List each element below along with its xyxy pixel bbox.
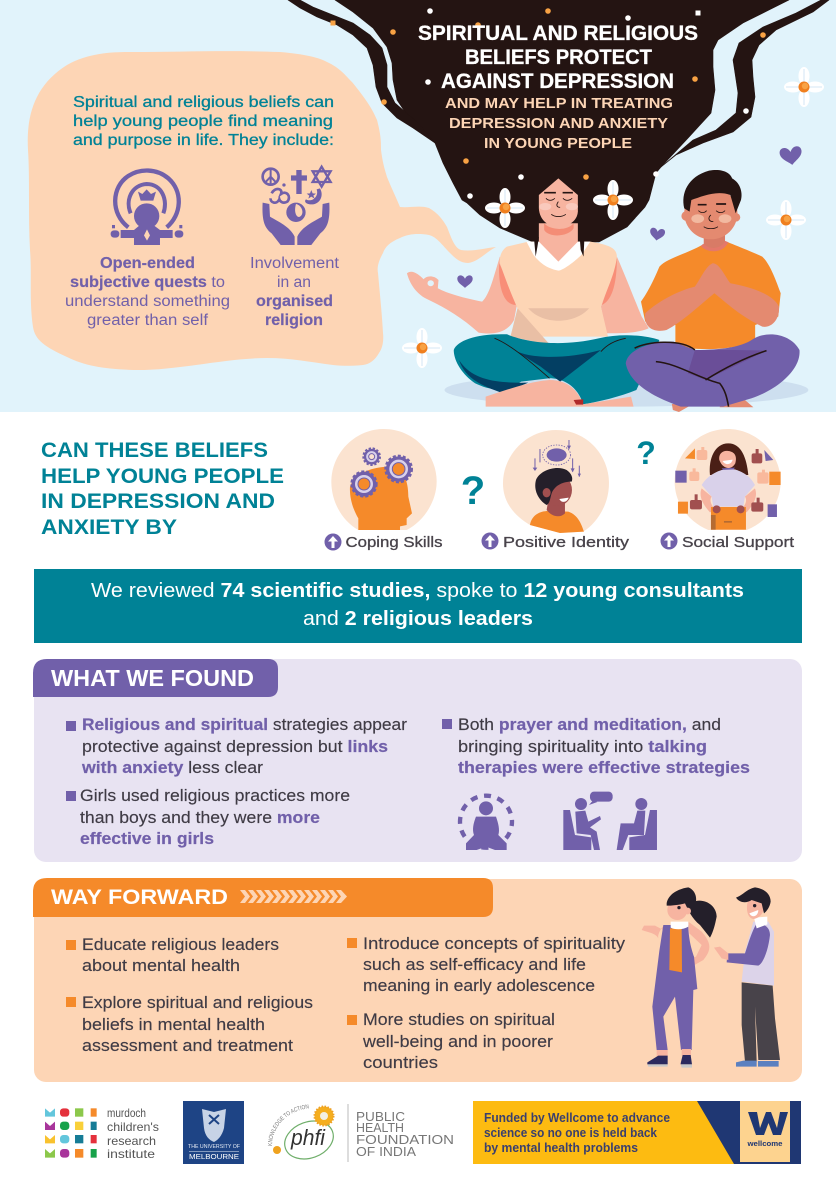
caption: open-ended subjective quests: understand something (65, 293, 230, 310)
hair dots (330, 8, 766, 199)
logo: Murdoch Children's Research Institute (45, 1106, 159, 1161)
caption: organised religion: organised (256, 293, 333, 310)
logo: Public Health Foundation of India: PUBLIC (356, 1109, 405, 1124)
logo: Wellcome funding banner: science so no one is held back (484, 1126, 657, 1140)
icon: religion symbols in hands (262, 167, 331, 245)
logo: University of Melbourne: MELBOURNE (189, 1154, 239, 1161)
question heading: IN DEPRESSION AND (41, 490, 275, 513)
question heading: ANXIETY BY (41, 516, 177, 539)
flowers and hearts (402, 67, 824, 368)
logo: Wellcome funding banner (473, 1101, 801, 1164)
action: educate leaders (66, 936, 279, 975)
title (418, 22, 698, 93)
logo: University of Melbourne (183, 1101, 244, 1164)
action: more studies: More studies on spiritual (363, 1011, 555, 1029)
bubble heading: help young people find meaning (73, 113, 333, 130)
title: BELIEFS PROTECT (465, 46, 652, 69)
action: introduce concepts: Introduce concepts of spirituality (363, 935, 626, 953)
caption: organised religion: religion (265, 312, 323, 329)
bubble heading: and purpose in life. They include: (73, 132, 334, 149)
finding: protective against depression: with anxiety less clear (81, 759, 264, 777)
caption: open-ended subjective quests: subjective quests to (70, 274, 225, 291)
what we found header (33, 659, 278, 697)
chevrons (240, 890, 347, 903)
labels with up arrows (324, 532, 795, 551)
subtitle: IN YOUNG PEOPLE (484, 135, 632, 152)
icon: meditation (460, 796, 512, 850)
caption: open-ended subjective quests: Open-ended (100, 255, 195, 272)
finding: protective against depression: protective against depression but links (82, 738, 388, 756)
finding: prayer and meditation: bringing spirituality into talking (458, 738, 707, 756)
finding: prayer and meditation (442, 716, 750, 777)
what we found header: WHAT WE FOUND (51, 665, 254, 691)
icon: talking therapy (563, 792, 657, 850)
speech bubble panel (28, 51, 496, 370)
action: more studies: well-being and in poorer (362, 1033, 554, 1051)
finding: girls: than boys and they were more (80, 809, 320, 827)
logo: Public Health Foundation of India: HEALTH (356, 1120, 404, 1135)
subtitle: AND MAY HELP IN TREATING (445, 95, 673, 112)
logo: Murdoch Children's Research Institute: institute (107, 1147, 155, 1161)
action: introduce concepts: meaning in early adolescence (363, 977, 595, 995)
logo: Public Health Foundation of India: KNOWLEDGE TO ACTION (268, 1104, 309, 1146)
action: more studies: countries (363, 1054, 438, 1072)
action: explore beliefs: Explore spiritual and religious (82, 994, 313, 1012)
ground shadow (445, 373, 808, 407)
action: explore beliefs: assessment and treatment (82, 1037, 293, 1055)
woman figure (407, 178, 659, 407)
top illustrated background (0, 0, 836, 412)
caption: organised religion (250, 255, 340, 329)
man figure (626, 170, 800, 412)
subtitle: DEPRESSION AND ANXIETY (449, 115, 668, 132)
action: introduce concepts (347, 935, 626, 995)
finding: protective against depression (66, 716, 408, 777)
finding: girls: Girls used religious practices more (80, 787, 350, 805)
finding: protective against depression: Religious and spiritual strategies appear (82, 716, 408, 734)
caption: open-ended subjective quests (65, 255, 230, 329)
panel: what we found (33, 659, 802, 862)
review banner (34, 569, 802, 643)
icon: positive identity boy with brain (503, 430, 609, 533)
logo: Public Health Foundation of India: FOUNDATION (356, 1132, 454, 1147)
logo: University of Melbourne: THE UNIVERSITY OF (188, 1144, 241, 1150)
caption: open-ended subjective quests: greater than self (87, 312, 209, 329)
icon: social support woman with thumbs up (675, 429, 781, 530)
title: AGAINST DEPRESSION (441, 70, 674, 93)
finding: girls (66, 787, 350, 848)
action: explore beliefs (66, 994, 313, 1055)
icon: question marks: ? (461, 469, 485, 513)
labels with up arrows: Coping Skills (346, 534, 442, 551)
logo: Wellcome funding banner: by mental health problems (484, 1141, 638, 1155)
finding: prayer and meditation: therapies were effective strategies (458, 759, 750, 777)
finding: girls: effective in girls (80, 830, 214, 848)
logo: Public Health Foundation of India (268, 1104, 454, 1162)
question heading: CAN THESE BELIEFS (41, 439, 268, 462)
logo: Public Health Foundation of India: OF INDIA (356, 1144, 416, 1159)
bubble heading (73, 94, 334, 149)
logo: Murdoch Children's Research Institute: murdoch (107, 1106, 146, 1120)
question heading (41, 439, 284, 539)
way forward header: WAY FORWARD (51, 886, 228, 909)
action: introduce concepts: such as self-efficacy and life (363, 956, 586, 974)
caption: organised religion: Involvement (250, 255, 340, 272)
question heading: HELP YOUNG PEOPLE (41, 465, 284, 488)
review banner: We reviewed 74 scientific studies, spoke to 12 young consultants (91, 579, 744, 602)
action: more studies (347, 1011, 555, 1072)
action: educate leaders: about mental health (82, 957, 240, 975)
logo: Murdoch Children's Research Institute: research (107, 1134, 156, 1148)
logo: Wellcome funding banner: Funded by Wellcome to advance (484, 1111, 670, 1125)
caption: organised religion: in an (277, 274, 311, 291)
labels with up arrows: Social Support (682, 534, 795, 551)
icon: question marks (461, 435, 656, 513)
subtitle (445, 95, 673, 152)
woman's flowing hair (288, 0, 829, 242)
logo: Public Health Foundation of India: phfi (290, 1125, 326, 1150)
icon: question marks: ? (636, 435, 656, 471)
icon: open-ended quest figure (111, 171, 183, 245)
finding: prayer and meditation: Both prayer and meditation, and (458, 716, 721, 734)
illustration: two young people talking (642, 887, 780, 1068)
logo: Wellcome funding banner: wellcome (746, 1139, 782, 1148)
panel: way forward (33, 878, 802, 1082)
icon: coping skills head with gears (331, 429, 437, 530)
meditating couple (407, 170, 808, 412)
title: SPIRITUAL AND RELIGIOUS (418, 22, 698, 45)
action: explore beliefs: beliefs in mental health (82, 1016, 265, 1034)
labels with up arrows: Positive Identity (503, 534, 630, 551)
bubble heading: Spiritual and religious beliefs can (73, 94, 334, 111)
logo: Murdoch Children's Research Institute: children's (107, 1120, 159, 1134)
review banner: and 2 religious leaders (303, 607, 533, 630)
action: educate leaders: Educate religious leaders (82, 936, 279, 954)
way forward header (33, 878, 493, 917)
